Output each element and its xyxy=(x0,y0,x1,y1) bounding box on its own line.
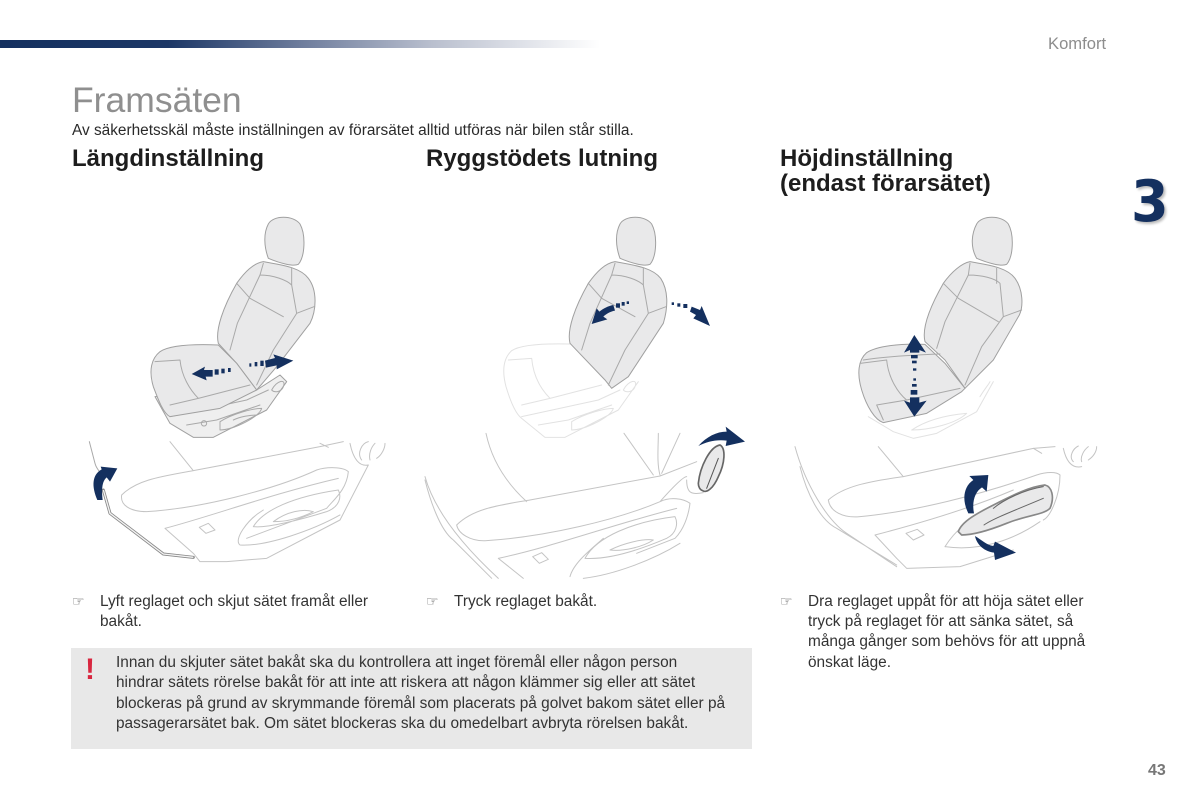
backrest xyxy=(924,262,1022,388)
instruction: Lyft reglaget och skjut sätet framåt eller xyxy=(100,593,368,610)
warning panel xyxy=(71,648,752,749)
release bar xyxy=(103,490,193,557)
warning text xyxy=(116,654,726,732)
seat side detail xyxy=(795,446,1097,568)
chapter number: 3 xyxy=(1131,169,1169,235)
cushion xyxy=(151,345,257,417)
arrows: forward and back xyxy=(192,354,293,380)
arrow: up and down xyxy=(904,335,927,417)
faded base xyxy=(868,382,993,438)
instruction: Tryck reglaget bakåt. xyxy=(454,593,597,610)
warning text: blockeras på grund av skrymmande föremål som placerats på golvet bakom sätet eller på xyxy=(116,695,725,712)
page number: 43 xyxy=(1148,762,1166,779)
instruction: tryck på reglaget för att sänka sätet, så xyxy=(808,613,1073,630)
arrow: push lever xyxy=(698,427,745,446)
headrest xyxy=(265,217,304,265)
header gradient bar xyxy=(0,40,600,48)
instruction: många gånger som behövs för att uppnå xyxy=(808,633,1085,650)
illustration: seat, length adjustment xyxy=(89,217,385,562)
backrest xyxy=(569,262,667,388)
instruction: Dra reglaget uppåt för att höja sätet eller xyxy=(808,593,1083,610)
warning text: Innan du skjuter sätet bakåt ska du kontrollera att inget föremål eller någon person xyxy=(116,654,677,671)
seat base xyxy=(155,375,287,437)
heading: length adjustment: Längdinställning xyxy=(72,145,264,172)
warning text: passagerarsätet bak. Om sätet blockeras ska du omedelbart avbryta rörelsen bakåt. xyxy=(116,715,688,732)
pointer icon: ☞ xyxy=(72,594,85,610)
heading: height: (endast förarsätet) xyxy=(780,170,991,197)
headrest xyxy=(972,217,1012,265)
lever xyxy=(698,445,724,491)
instruction: önskat läge. xyxy=(808,654,891,671)
backrest xyxy=(218,262,315,390)
headrest xyxy=(616,217,656,265)
warning text: hindrar sätets rörelse bakåt för att inte att riskera att någon klämmer sig eller att sätet xyxy=(116,674,695,691)
arrow: lift xyxy=(964,475,988,513)
step: height xyxy=(780,593,1086,671)
cushion xyxy=(859,344,965,423)
instruction xyxy=(808,593,1086,671)
heading: height xyxy=(780,145,991,197)
heading: backrest: Ryggstödets lutning xyxy=(426,145,658,172)
section label: Komfort xyxy=(1048,34,1106,53)
illustration: seat, height adjustment xyxy=(795,217,1097,568)
illustration: seat, backrest tilt xyxy=(425,217,745,578)
pointer icon: ☞ xyxy=(426,594,439,610)
faded cushion xyxy=(504,344,638,437)
title: Framsäten xyxy=(72,80,242,120)
arrow: press xyxy=(975,536,1016,560)
step: length xyxy=(72,593,368,630)
arrows: tilt xyxy=(592,301,710,326)
arrow: lift bar xyxy=(94,467,117,500)
seat side detail xyxy=(121,442,385,562)
heading: height: Höjdinställning xyxy=(780,145,953,172)
seat side detail xyxy=(425,433,703,578)
intro text: Av säkerhetsskäl måste inställningen av förarsätet alltid utföras när bilen står stilla. xyxy=(72,122,634,139)
instruction xyxy=(100,593,368,630)
lever xyxy=(958,485,1052,535)
pointer icon: ☞ xyxy=(780,594,793,610)
warning mark: ! xyxy=(85,653,95,686)
instruction: bakåt. xyxy=(100,613,142,630)
step: backrest xyxy=(426,593,597,610)
